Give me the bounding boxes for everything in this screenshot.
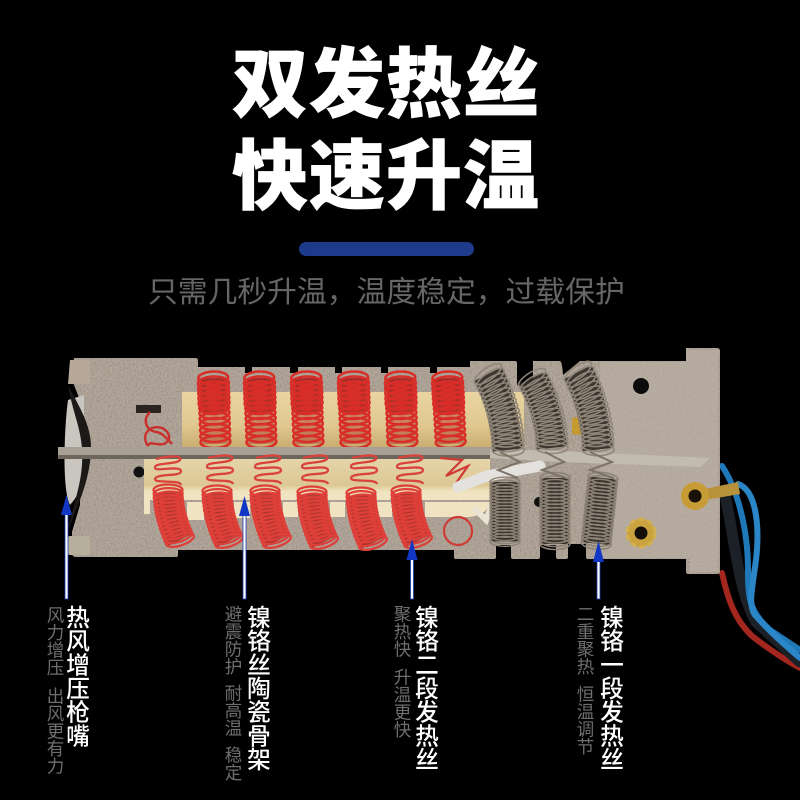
- label 2 title: 镍铬丝陶瓷骨架: [243, 605, 269, 771]
- ceramic back bar: [182, 392, 524, 447]
- arrow 2: [239, 496, 250, 599]
- label 3 title: 镍铬二段发热丝: [411, 605, 437, 771]
- center support strip: [58, 447, 710, 467]
- board lighter right section: [600, 350, 718, 572]
- title line 1: 双发热丝: [232, 43, 540, 128]
- red coils: upper row: [197, 371, 466, 449]
- arrow 1: [61, 495, 72, 599]
- ceramic fibre board: [72, 348, 720, 574]
- white insulated sleeve: [458, 466, 540, 520]
- label 2 description: 避震防护 耐高温 稳定: [223, 605, 243, 780]
- gold rivet behind coil: [572, 416, 590, 436]
- ceramic front bar: [144, 458, 490, 500]
- label 4 title: 镍铬一段发热丝: [596, 605, 622, 771]
- red coils: lower row: [153, 484, 433, 553]
- subtitle: 只需几秒升温，温度稳定，过载保护: [148, 276, 625, 309]
- brass eyelet and terminal: [681, 482, 740, 510]
- arrow 4: [593, 541, 604, 599]
- wires: [722, 466, 800, 668]
- arrow 3: [406, 539, 418, 599]
- ceramic front teeth: [144, 500, 490, 520]
- nozzle crescent: [64, 360, 91, 555]
- label 1 title: 热风增压枪嘴: [62, 605, 88, 747]
- accent bar: [299, 242, 474, 256]
- brass star rivet: [627, 519, 655, 547]
- label 3 description: 聚热快 升温更快: [392, 605, 412, 738]
- grey coils: [471, 358, 618, 551]
- red coils: lower sparse wire sections: [155, 455, 423, 485]
- holes and slot: [633, 378, 649, 394]
- label 1 description: 风力增压 出风更有力: [45, 606, 65, 774]
- lower-rear wire loop: [145, 412, 172, 446]
- title line 2: 快速升温: [232, 135, 540, 220]
- small red loop near white sleeve: [440, 458, 472, 545]
- label 4 description: 二重聚热 恒温调节: [575, 605, 595, 755]
